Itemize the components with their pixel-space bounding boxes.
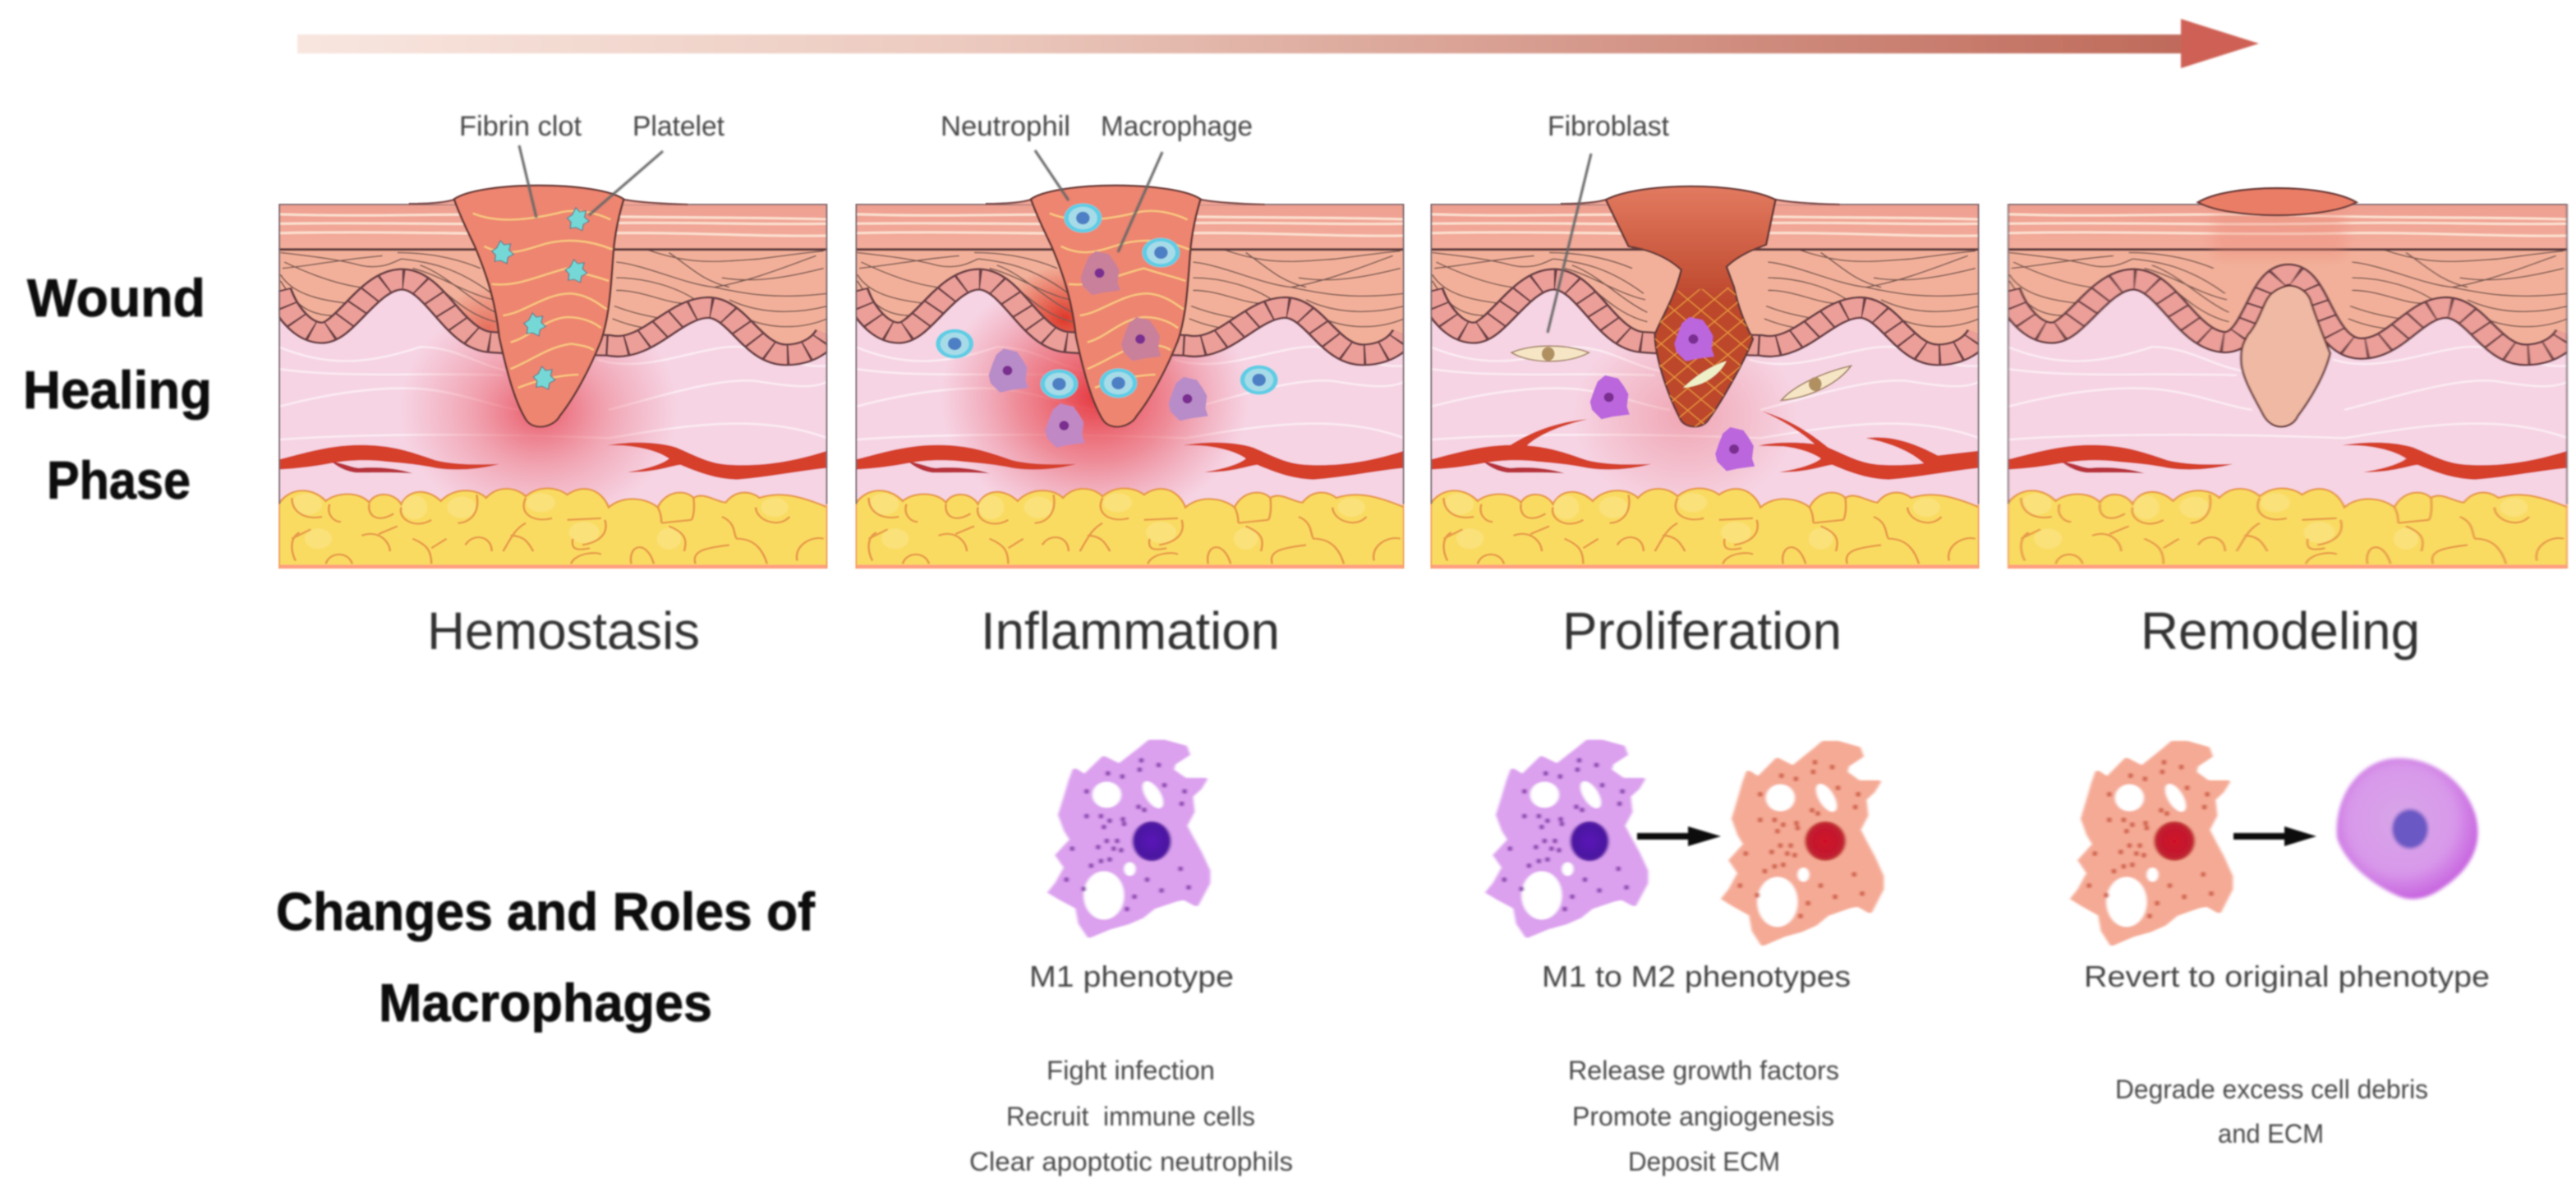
granulation tissue plug with collagen mesh <box>1561 186 1840 432</box>
fibrin clot <box>986 186 1265 426</box>
skin layers <box>855 204 1404 568</box>
labels: hemostasis callouts: Fibrin clot <box>459 111 582 142</box>
text: macrophage phenotypes: Revert to original phenotype <box>2084 960 2490 993</box>
text: M2 roles <box>1568 1056 1839 1176</box>
icon: M1 macrophage <box>1051 741 1208 937</box>
text: M1 roles: Fight infection <box>1046 1056 1215 1085</box>
heading: Changes and Roles of Macrophages: Changes and Roles of <box>276 881 815 941</box>
text: M1 roles <box>969 1056 1293 1176</box>
phase names <box>427 601 2420 660</box>
arrow: revert <box>2233 826 2316 846</box>
phase names: Proliferation <box>1562 601 1842 660</box>
skin layers <box>1430 204 1979 568</box>
panel: hemostasis skin diagram <box>278 186 827 568</box>
icon: original round cell <box>2337 758 2478 899</box>
text: reverted phenotype roles <box>2115 1075 2428 1148</box>
neutrophils <box>936 203 1278 398</box>
phase names: Remodeling <box>2141 601 2420 660</box>
fibroblasts <box>1511 346 1851 400</box>
text: macrophage phenotypes: M1 phenotype <box>1029 960 1234 993</box>
phase names: Hemostasis <box>427 601 700 660</box>
arrow: progression over time <box>297 19 2259 68</box>
labels: proliferation callout: Fibroblast <box>1548 111 1670 142</box>
text: M1 roles: Recruit immune cells <box>1006 1102 1255 1131</box>
skin layers <box>278 204 827 568</box>
platelets <box>492 208 589 389</box>
text: macrophage phenotypes: M1 to M2 phenotypes <box>1542 960 1851 993</box>
heading: Changes and Roles of Macrophages <box>276 881 815 1033</box>
fibrin clot <box>409 186 688 426</box>
dashed divider <box>1994 711 1998 1022</box>
text: macrophage phenotypes <box>1029 960 2490 993</box>
new blood vessel branches <box>1504 412 1979 466</box>
panel: remodeling skin diagram <box>2008 188 2568 568</box>
macrophages <box>989 251 1208 448</box>
phase names: Inflammation <box>981 601 1280 660</box>
heading: Wound Healing Phase <box>23 268 212 510</box>
labels: inflammation callouts <box>941 111 1253 252</box>
text: reverted phenotype roles: and ECM <box>2218 1119 2324 1148</box>
labels: inflammation callouts: Neutrophil <box>941 111 1070 142</box>
text: reverted phenotype roles: Degrade excess cell debris <box>2115 1075 2428 1104</box>
heading: Changes and Roles of Macrophages: Macrophages <box>379 973 712 1033</box>
icon: M2 macrophage <box>1724 743 1881 944</box>
panel: proliferation skin diagram <box>1430 186 1979 568</box>
macrophages <box>1590 317 1755 471</box>
text: M2 roles: Deposit ECM <box>1628 1147 1780 1176</box>
dashed divider <box>1413 711 1418 1022</box>
icon: M1 macrophage before transition <box>1488 741 1645 937</box>
heading: Wound Healing Phase: Phase <box>47 450 191 510</box>
arrow: M1 to M2 <box>1637 826 1721 846</box>
heading: Wound Healing Phase: Healing <box>23 360 212 420</box>
heading: Wound Healing Phase: Wound <box>27 268 205 328</box>
labels: hemostasis callouts <box>459 111 725 218</box>
text: M2 roles: Promote angiogenesis <box>1572 1102 1834 1131</box>
skin layers <box>2008 204 2568 568</box>
labels: proliferation callout <box>1548 111 1670 333</box>
text: M2 roles: Release growth factors <box>1568 1056 1839 1085</box>
labels: hemostasis callouts: Platelet <box>632 111 725 142</box>
icon: M2 macrophage before reverting <box>2073 743 2230 944</box>
panel: inflammation skin diagram <box>855 186 1404 568</box>
text: M1 roles: Clear apoptotic neutrophils <box>969 1147 1293 1176</box>
scar tissue <box>2241 286 2330 426</box>
surface scab <box>2198 188 2357 215</box>
labels: inflammation callouts: Macrophage <box>1101 111 1253 142</box>
